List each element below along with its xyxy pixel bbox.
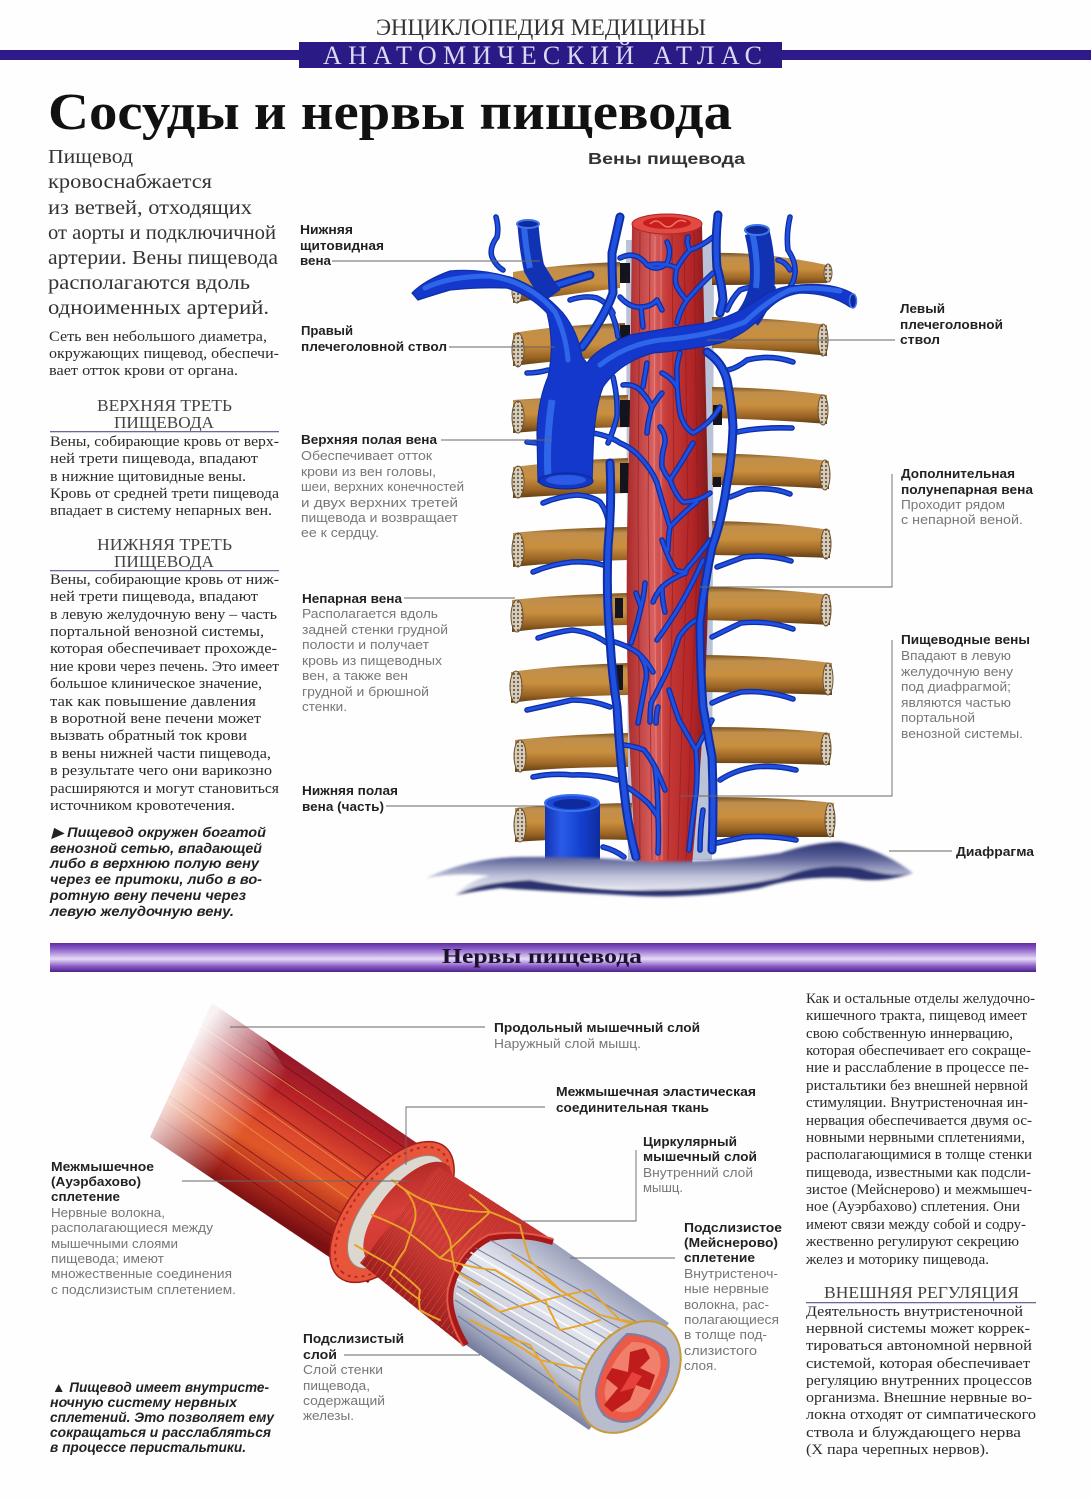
text block: lower third: так как повышение давления [50,694,256,710]
header: encyclopedia masthead [0,15,1091,70]
outer longitudinal muscle [150,1004,416,1283]
text block: upper third: ПИЩЕВОДА [114,413,215,432]
label: submucosa: Подслизистый [303,1332,404,1346]
callout: venous network [49,825,267,919]
label: Auerbach plexus: (Ауэрбахово) [51,1175,141,1189]
text block: lower third: в результате чего они варикозно [50,763,272,779]
label: submucosa: слой [303,1348,337,1362]
label: Auerbach plexus: с подслизистым сплетением. [51,1283,236,1297]
leader lines: veins diagram [332,261,952,851]
label: Meissner plexus: ные нервные [684,1282,769,1296]
label: superior vena cava: шеи, верхних конечностей [301,480,464,494]
text block: lower third: источником кровотечения. [50,798,235,814]
text block: upper third: впадает в систему непарных вен. [50,503,272,519]
label: left brachiocephalic trunk: Левый [900,302,945,316]
label: Auerbach plexus: Межмышечное [51,1160,154,1174]
text block: lower third: большое клиническое значение, [50,676,262,692]
cut rim of outer muscle [306,1120,478,1304]
label: azygos vein: Непарная вена [302,592,403,606]
text block: introduction: из ветвей, отходящих [48,197,252,219]
upper branch trunks [524,225,762,318]
small veins [491,215,796,857]
label: inferior thyroid vein: щитовидная [300,239,384,253]
text block: external regulation: ствола и блуждающего нерва [806,1425,1022,1441]
label: accessory hemiazygos vein: полунепарная вена [901,483,1034,497]
text block: innervation: пищевода, известными как подсли- [806,1165,1031,1181]
label: azygos vein: грудной и брюшной [302,685,429,699]
lumen end face [558,1302,702,1452]
label: submucosa: железы. [303,1409,354,1423]
text block: external regulation: (X пара черепных нервов). [806,1442,989,1458]
text block: innervation: Как и остальные отделы желудочно- [806,991,1035,1007]
text block: innervation: кишечного тракта, пищевод имеет [806,1008,1028,1024]
label: Meissner plexus: в толще под- [684,1328,767,1342]
label: elastic connective tissue: Межмышечная эластическая [556,1085,756,1099]
label: Meissner plexus: слизистого [684,1344,757,1358]
section band: nerves of the esophagus [50,943,1036,972]
text block: lower third: расширяются и могут становиться [50,781,279,797]
title: Сосуды и нервы пищевода [48,84,732,141]
text block: lower third: в вены нижней части пищевода, [50,746,271,762]
label: longitudinal muscle layer: Продольный мышечный слой [494,1021,700,1035]
ribs [510,253,835,842]
text block: upper third [50,396,280,519]
esophagus backing strip [626,240,714,860]
text block: introduction: располагаются вдоль [48,272,250,294]
text block: introduction: Пищевод [48,146,133,168]
callout: intrinsic nerve plexuses: сокращаться и расслабляться [50,1425,271,1440]
label: left brachiocephalic trunk [900,302,1003,347]
label: esophageal veins: желудочную вену [901,665,1014,679]
label: Auerbach plexus: множественные соединения [51,1267,232,1281]
label: esophageal veins: являются частью [901,696,1011,710]
label: inferior vena cava [302,784,398,814]
text block: innervation [805,991,1035,1268]
label: right brachiocephalic trunk [301,324,447,354]
label: inferior vena cava: Нижняя полая [302,784,398,798]
illustration: esophagus veins [412,214,913,896]
text block: lower third: которая обеспечивает прохожде- [50,641,277,657]
label: accessory hemiazygos vein: с непарной веной. [901,513,1023,527]
label: superior vena cava: пищевода и возвращает [301,511,458,525]
label: accessory hemiazygos vein: Дополнительная [901,467,1015,481]
callout: intrinsic nerve plexuses [50,1380,276,1455]
text block: introduction: артерии. Вены пищевода [48,247,278,269]
label: esophageal veins: венозной системы. [901,727,1023,741]
label: superior vena cava: и двух верхних третей [301,496,458,510]
text block: innervation: имеют связи между собой и содру- [806,1217,1026,1233]
text block: innervation: ристальтики без внешней нервной [806,1078,1028,1094]
callout: venous network: ротную вену печени через [49,888,246,903]
text block: introduction: кровоснабжается [48,171,212,193]
text block: innervation: ное (Ауэрбахово) сплетения. Они [806,1199,1020,1215]
label: esophageal veins: Впадают в левую [901,649,1011,663]
label: Auerbach plexus: пищевода; имеют [51,1252,164,1266]
callout: intrinsic nerve plexuses: ночную систему нервных [50,1395,238,1410]
text block: innervation: зистое (Мейснерово) и межмышеч- [806,1182,1032,1198]
text block: external regulation: нервной системы может коррек- [806,1321,1030,1337]
label: right brachiocephalic trunk: плечеголовной ствол [301,340,447,354]
label: inferior thyroid vein: вена [300,254,332,268]
diaphragm [426,842,913,896]
label: circular muscle layer: мышц. [643,1181,683,1195]
callout: venous network: венозной сетью, впадающей [50,841,263,856]
label: circular muscle layer: Внутренний слой [643,1166,753,1180]
text block: innervation: которая обеспечивает его сокраще- [806,1043,1031,1059]
text block: lower third: ние крови через печень. Это имеет [50,659,280,675]
header: encyclopedia masthead: АНАТОМИЧЕСКИЙ АТЛАС [323,41,762,70]
label: Meissner plexus: (Мейснерово) [684,1236,778,1250]
text block: innervation: желез и моторику пищевода. [805,1252,989,1268]
inferior vena cava [545,795,600,860]
text block: upper third: ней трети пищевода, впадают [50,451,259,467]
text block: innervation: ние и расслабление в процессе пе- [806,1060,1029,1076]
label: accessory hemiazygos vein [901,467,1034,527]
label: elastic connective tissue: соединительная ткань [556,1101,709,1115]
label: inferior thyroid vein [300,223,384,268]
text block: lower third: в воротной вене печени может [50,711,262,727]
text block: upper third: Кровь от средней трети пищевода [50,486,280,502]
text block: lower third: ПИЩЕВОДА [114,552,215,571]
text block: lower third: ней трети пищевода, впадают [50,589,259,605]
label: Auerbach plexus: Нервные волокна, [51,1206,165,1220]
label: inferior vena cava: вена (часть) [302,800,384,814]
label: Meissner plexus: Внутристеноч- [684,1267,778,1281]
label: Auerbach plexus: располагающиеся между [51,1221,214,1235]
text block: external regulation: Деятельность внутристеночной [806,1304,1023,1320]
text block: introduction: вает отток крови от органа. [49,363,238,379]
label: esophageal veins [901,633,1030,741]
label: azygos vein [302,592,448,714]
text block: innervation: располагающимися в толще стенки [806,1147,1032,1163]
heading: veins of the esophagus: Вены пищевода [588,151,745,168]
header: encyclopedia masthead: ЭНЦИКЛОПЕДИЯ МЕДИЦИНЫ [376,15,706,40]
text block: external regulation: тироваться автономной нервной [806,1338,1032,1354]
label: circular muscle layer: Циркулярный [643,1135,737,1149]
label: submucosa: содержащий [303,1394,385,1408]
text block: introduction: окружающих пищевод, обеспечи- [49,346,279,362]
label: longitudinal muscle layer: Наружный слой мышц. [494,1037,641,1051]
label: Meissner plexus: слоя. [684,1359,717,1373]
text block: external regulation: регуляцию внутренних процессов [806,1373,1032,1389]
label: Auerbach plexus: мышечными слоями [51,1237,178,1251]
label: submucosa: Слой стенки [303,1363,383,1377]
text block: introduction: одноименных артерий. [48,297,269,319]
label: esophageal veins: под диафрагмой; [901,680,1011,694]
text block: innervation: жественно регулируют секрецию [805,1234,1019,1250]
label: azygos vein: полости и получает [302,638,429,652]
label: elastic connective tissue [556,1085,756,1115]
label: azygos vein: Располагается вдоль [302,607,438,621]
text block: lower third: НИЖНЯЯ ТРЕТЬ [97,535,232,554]
text block: introduction: Сеть вен небольшого диаметра, [49,329,267,345]
label: azygos vein: стенки. [302,700,347,714]
text block: lower third: в левую желудочную вену – часть [50,607,277,623]
text block: lower third [50,535,280,814]
label: Meissner plexus [684,1221,782,1373]
callout: intrinsic nerve plexuses: сплетений. Это позволяет ему [50,1410,276,1425]
callout: venous network: левую желудочную вену. [49,904,234,919]
text block: lower third: Вены, собирающие кровь от ниж- [50,572,279,588]
label: right brachiocephalic trunk: Правый [301,324,353,338]
text block: innervation: стимуляции. Внутристеночная ин- [806,1095,1028,1111]
callout: venous network: либо в верхнюю полую вену [49,856,261,871]
label: Auerbach plexus [51,1160,236,1297]
label: esophageal veins: Пищеводные вены [901,633,1030,647]
text block: lower third: вызвать обратный ток крови [50,728,247,744]
callout: venous network: ▶ Пищевод окружен богатой [51,825,267,840]
text block: external regulation: ВНЕШНЯЯ РЕГУЛЯЦИЯ [824,1283,1019,1302]
text block: lower third: портальной венозной системы, [50,624,264,640]
text block: external regulation: организма. Внешние нервные во- [806,1390,1032,1406]
label: azygos vein: кровь из пищеводных [302,654,443,668]
label: Auerbach plexus: сплетение [51,1190,120,1204]
label: submucosa: пищевода, [303,1379,370,1393]
label: azygos vein: задней стенки грудной [302,623,448,637]
label: longitudinal muscle layer [494,1021,700,1051]
submucosa [447,1233,669,1430]
text block: innervation: свою собственную иннервацию, [806,1026,1013,1042]
callout: intrinsic nerve plexuses: в процессе перистальтики. [50,1440,246,1455]
callout: intrinsic nerve plexuses: ▲ Пищевод имеет внутристе- [52,1380,269,1395]
label: Meissner plexus: полагающиеся [684,1313,779,1327]
leader lines: nerves diagram [182,1027,675,1355]
label: submucosa [303,1332,404,1423]
label: diaphragm: Диафрагма [956,845,1035,859]
text block: upper third: в нижние щитовидные вены. [50,469,246,485]
label: circular muscle layer: мышечный слой [643,1150,757,1164]
text block: external regulation: системой, которая обеспечивает [806,1356,1031,1372]
label: left brachiocephalic trunk: плечеголовной [900,318,1003,332]
text block: introduction [48,146,279,379]
label: inferior thyroid vein: Нижняя [300,223,353,237]
label: accessory hemiazygos vein: Проходит рядом [901,498,1005,512]
label: esophageal veins: портальной [901,711,975,725]
label: Meissner plexus: Подслизистое [684,1221,782,1235]
brachiocephalic veins and superior vena cava [412,220,856,489]
illustration: esophagus layers and nerves [150,1004,682,1434]
text block: innervation: новными нервными сплетениями, [806,1130,1025,1146]
text block: innervation: нервация обеспечивается двумя ос- [806,1113,1032,1129]
label: superior vena cava [301,433,464,540]
text block: external regulation [806,1283,1036,1458]
esophagus [627,214,709,865]
circular muscle [360,1162,548,1344]
label: circular muscle layer [643,1135,757,1195]
connective tissue ring [329,1139,465,1285]
label: superior vena cava: крови из вен головы, [301,465,436,479]
dark shadows behind esophagus [615,263,722,690]
label: Meissner plexus: сплетение [684,1251,755,1265]
callout: venous network: через ее притоки, либо в во- [50,872,263,887]
nerve plexus [355,1180,655,1410]
text block: introduction: от аорты и подключичной [48,222,276,244]
label: superior vena cava: Верхняя полая вена [301,433,438,447]
text block: upper third: ВЕРХНЯЯ ТРЕТЬ [97,396,232,415]
text block: external regulation: локна отходят от симпатического [806,1407,1036,1423]
label: azygos vein: вен, а также вен [302,669,408,683]
text block: upper third: Вены, собирающие кровь от верх- [50,434,279,450]
label: superior vena cava: ее к сердцу. [301,526,379,540]
label: superior vena cava: Обеспечивает отток [301,449,433,463]
label: left brachiocephalic trunk: ствол [900,333,940,347]
section band: nerves of the esophagus: Нервы пищевода [442,944,643,968]
label: Meissner plexus: волокна, рас- [684,1298,769,1312]
